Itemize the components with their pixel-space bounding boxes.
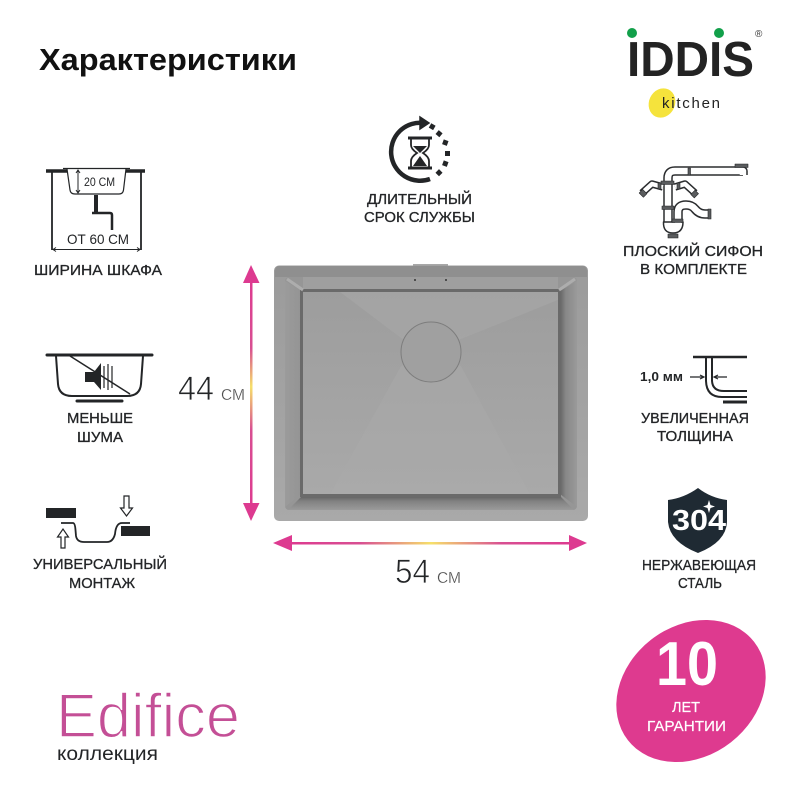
caption line 2: ШУМА [77,429,123,446]
caption line 2: В КОМПЛЕКТЕ [640,261,747,278]
arrow: height dimension [243,265,260,521]
thickness value: 1,0 мм [640,369,683,384]
basin floor edge [300,289,561,497]
caption: ПЛОСКИЙ СИФОН [623,242,763,260]
feature: increased thickness [640,357,749,445]
height value [178,370,245,408]
warranty badge [588,591,794,791]
caption: УНИВЕРСАЛЬНЫЙ [33,555,167,573]
feature: long service life [364,117,475,226]
drain circle [401,322,461,382]
caption: УВЕЛИЧЕННАЯ [641,410,749,427]
collection caption: коллекция [57,744,158,765]
registered mark: ® [755,29,763,40]
corner highlights [287,279,575,290]
feature: flat siphon [623,164,763,278]
right wall [560,281,577,507]
width label: ОТ 60 СМ [67,231,129,247]
icon: cabinet with sink [46,168,145,252]
icon: hourglass in circular arrow [391,117,450,181]
caption: НЕРЖАВЕЮЩАЯ [642,557,756,574]
icon: siphon [639,164,748,238]
icon: shield [668,488,727,553]
caption: ШИРИНА ШКАФА [34,262,162,279]
basin walls [285,277,577,510]
feature: cabinet width [34,168,162,279]
feature: universal mounting [33,496,167,592]
caption line 2: МОНТАЖ [69,575,135,592]
warranty years: 10 [656,630,718,699]
collection name [56,682,240,765]
width value: СМ [437,570,461,587]
yellow blob [644,84,680,122]
feature: stainless steel 304 [642,488,756,592]
top rim band [275,266,587,277]
warranty text line 2: ГАРАНТИИ [647,718,726,735]
depth label: 20 СМ [84,177,115,189]
left wall [285,281,301,507]
caption line 2: ТОЛЩИНА [657,428,733,445]
icon: mounting diagram [46,496,150,548]
height value: 44 [178,370,214,408]
mount dots [414,279,447,281]
caption line 2: СТАЛЬ [678,575,722,592]
sink outer rim [274,266,588,521]
caption: МЕНЬШЕ [67,410,133,427]
shield number: 304 [672,505,726,537]
warranty text: ЛЕТ [672,699,700,716]
kitchen wordmark: kitchen [662,95,720,112]
title: Характеристики [39,42,297,77]
icon: sink with muted speaker [47,355,152,401]
badge shape [588,591,794,791]
collection title: Edifice [56,682,240,751]
basin floor [303,292,558,494]
width value: 54 [395,553,430,591]
width value [395,553,461,591]
height value: СМ [221,387,245,404]
caption line 2: СРОК СЛУЖБЫ [364,209,475,226]
sink top view [274,264,588,521]
faucet hole cover [413,264,448,267]
caption: ДЛИТЕЛЬНЫЙ [367,190,472,208]
bottom wall [288,496,574,510]
logo: IDDIS kitchen [627,28,763,122]
arrow: width dimension [273,535,587,551]
feature: less noise [47,355,152,446]
logo wordmark: IDDIS [627,33,754,87]
floor slopes [330,292,558,494]
icon: wall cross-section [690,357,747,402]
logo green dots [627,28,724,38]
icon: sparkle [703,500,715,513]
top wall [303,277,558,289]
